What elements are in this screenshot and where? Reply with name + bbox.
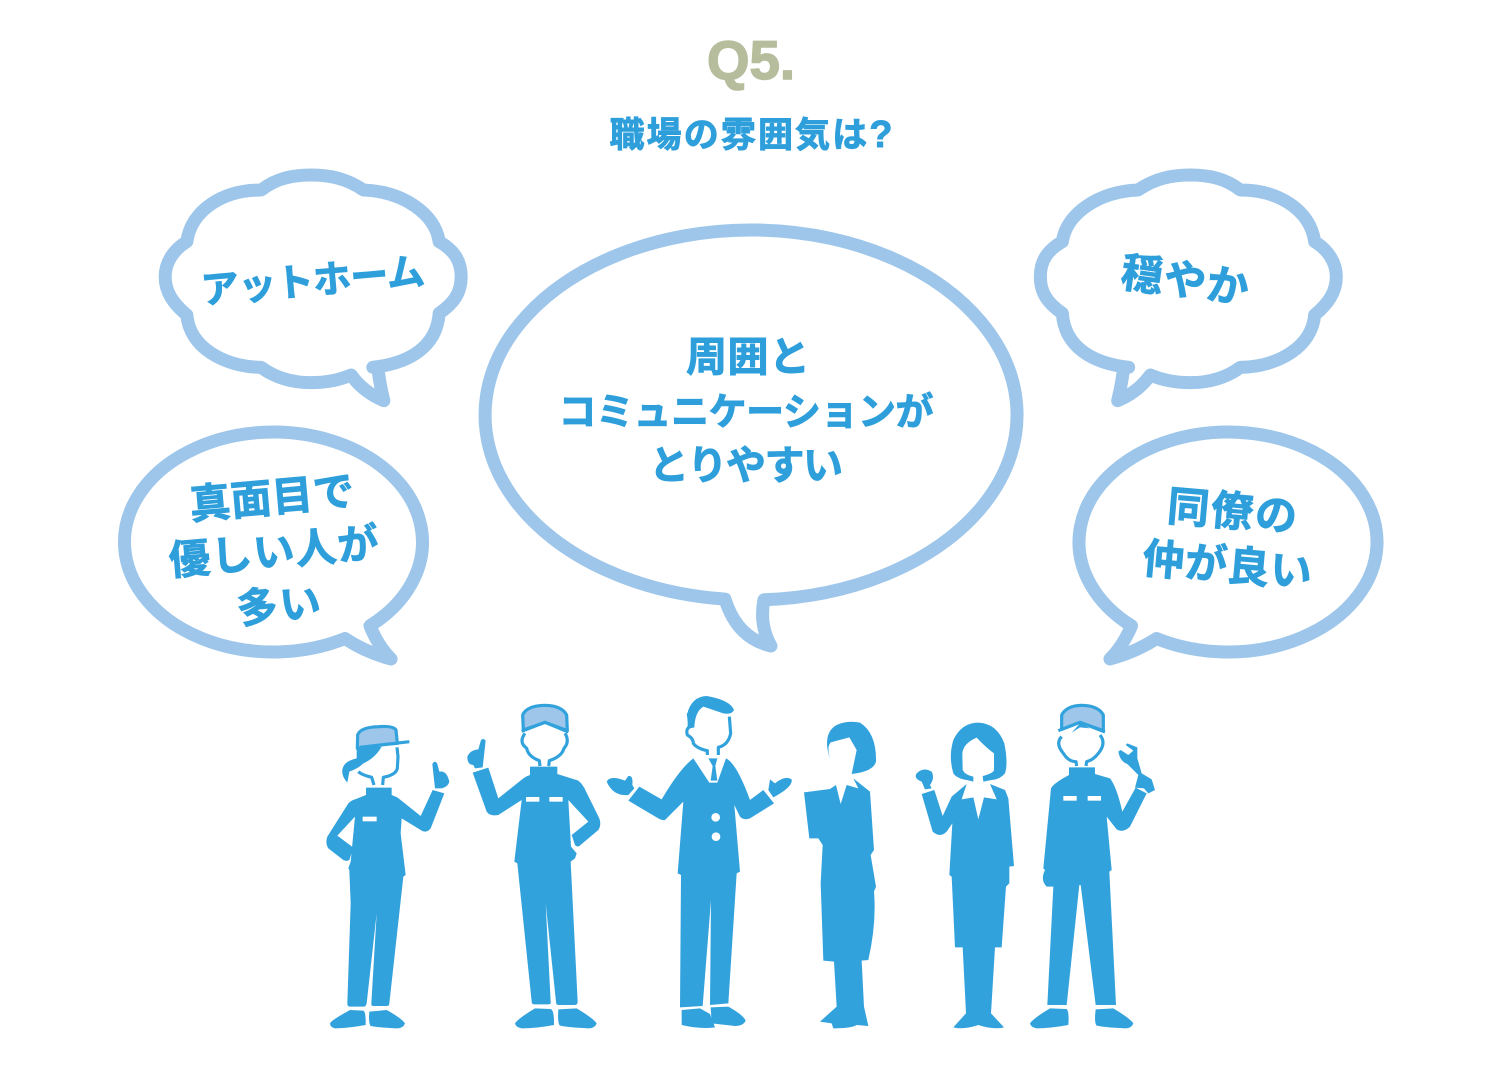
speech bubble: serious and kind people: 多い (235, 579, 323, 633)
person: woman in suit raising fist (916, 723, 1014, 1028)
person: man in cap, thumbs up (467, 705, 600, 1028)
person: man in cap holding wrench (1030, 705, 1155, 1028)
speech bubble: colleagues get along: 仲が良い (1141, 535, 1314, 596)
heading: workplace atmosphere question: 職場の雰囲気は? (610, 114, 892, 156)
speech bubble: easy to communicate: とりやすい (649, 444, 843, 488)
people group (326, 696, 1155, 1028)
speech bubble: easy to communicate: コミュニケーションが (558, 392, 934, 434)
speech bubble: easy to communicate: 周囲と (686, 334, 810, 380)
person: woman in cap, thumbs up (326, 726, 449, 1028)
speech bubble: at home (165, 175, 461, 401)
person: woman in suit holding clipboard (804, 722, 876, 1028)
speech bubble: serious and kind people: 真面目で (188, 468, 356, 528)
speech bubble: calm: 穏やか (1118, 248, 1252, 313)
speech bubble: at home: アットホーム (200, 251, 426, 313)
speech bubble: serious and kind people (124, 432, 422, 659)
speech bubble: calm (1040, 175, 1336, 401)
speech bubble: colleagues get along (1079, 432, 1377, 659)
speech bubble: colleagues get along: 同僚の (1165, 482, 1299, 541)
speech bubble: serious and kind people: 優しい人が (167, 520, 380, 584)
title: Q5.: Q5. (707, 29, 795, 91)
person: man in suit with open hands (607, 696, 792, 1028)
speech bubble: easy to communicate (485, 230, 1017, 646)
